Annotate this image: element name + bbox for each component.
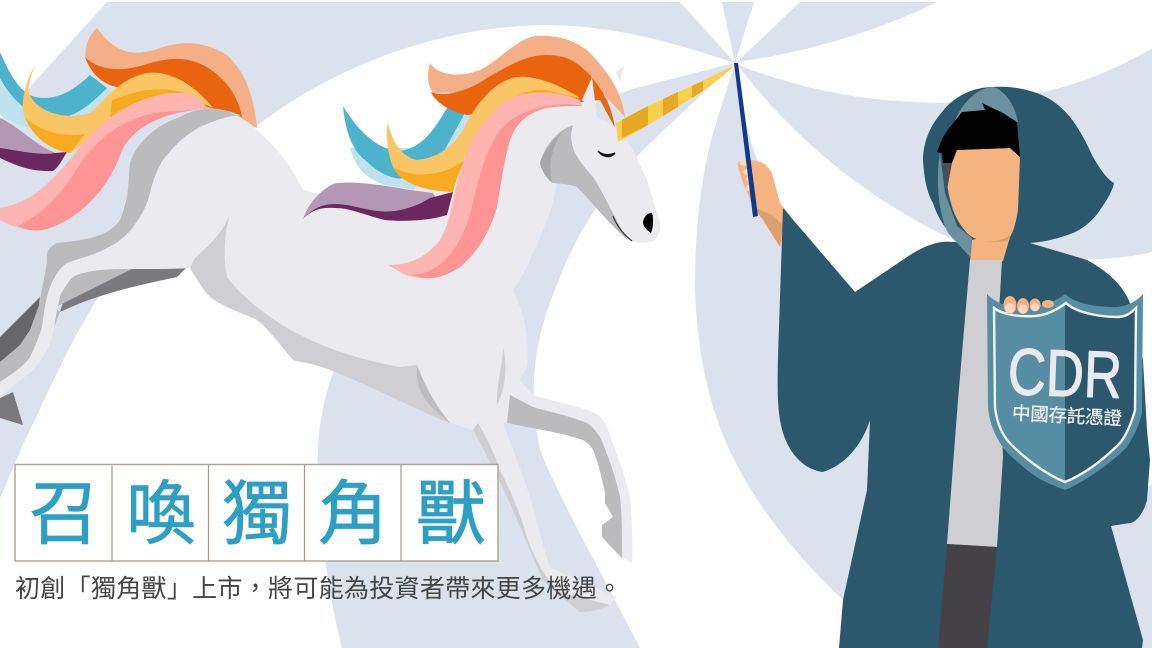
shield text: CDR: CDR — [1007, 334, 1123, 412]
unicorn tail — [0, 28, 257, 230]
title: 召喚獨角獸 in five boxes: 召 — [29, 475, 99, 553]
chin shadow — [986, 235, 1010, 242]
unicorn head details — [540, 66, 653, 241]
face — [947, 148, 1020, 242]
mouth — [613, 216, 632, 241]
trousers — [938, 544, 997, 648]
shield text: 中國存託憑證: 中國存託憑證 — [1011, 402, 1122, 429]
eye — [598, 151, 615, 157]
title: 召喚獨角獸 in five boxes: 喚 — [126, 475, 196, 553]
shirt — [947, 260, 1003, 547]
CDR shield — [987, 294, 1143, 490]
cheek shadow — [540, 125, 628, 240]
hair shadow — [943, 163, 952, 190]
hood lining — [938, 87, 1018, 257]
unicorn far legs — [0, 264, 190, 425]
unicorn body shading — [190, 213, 622, 612]
unicorn body — [0, 77, 660, 612]
title: 召喚獨角獸 in five boxes — [15, 464, 498, 561]
forearm and hand — [737, 160, 790, 247]
neck — [970, 230, 1012, 261]
hood — [923, 87, 1114, 250]
title: 召喚獨角獸 in five boxes: 獨 — [222, 475, 292, 553]
title: 召喚獨角獸 in five boxes: 獸 — [416, 475, 486, 553]
unicorn rump shadow — [40, 109, 240, 310]
subtitle text: 初創「獨角獸」上市，將可能為投資者帶來更多機遇。 — [15, 575, 622, 603]
hair — [937, 103, 1020, 163]
person: wizard in CDR cloak — [734, 63, 1150, 648]
fingers — [1004, 296, 1054, 314]
robe — [778, 208, 1150, 648]
wand — [734, 63, 758, 217]
unicorn mane — [303, 36, 625, 278]
unicorn horn — [616, 65, 735, 142]
nostril — [643, 213, 653, 233]
title: 召喚獨角獸 in five boxes: 角 — [318, 475, 388, 553]
